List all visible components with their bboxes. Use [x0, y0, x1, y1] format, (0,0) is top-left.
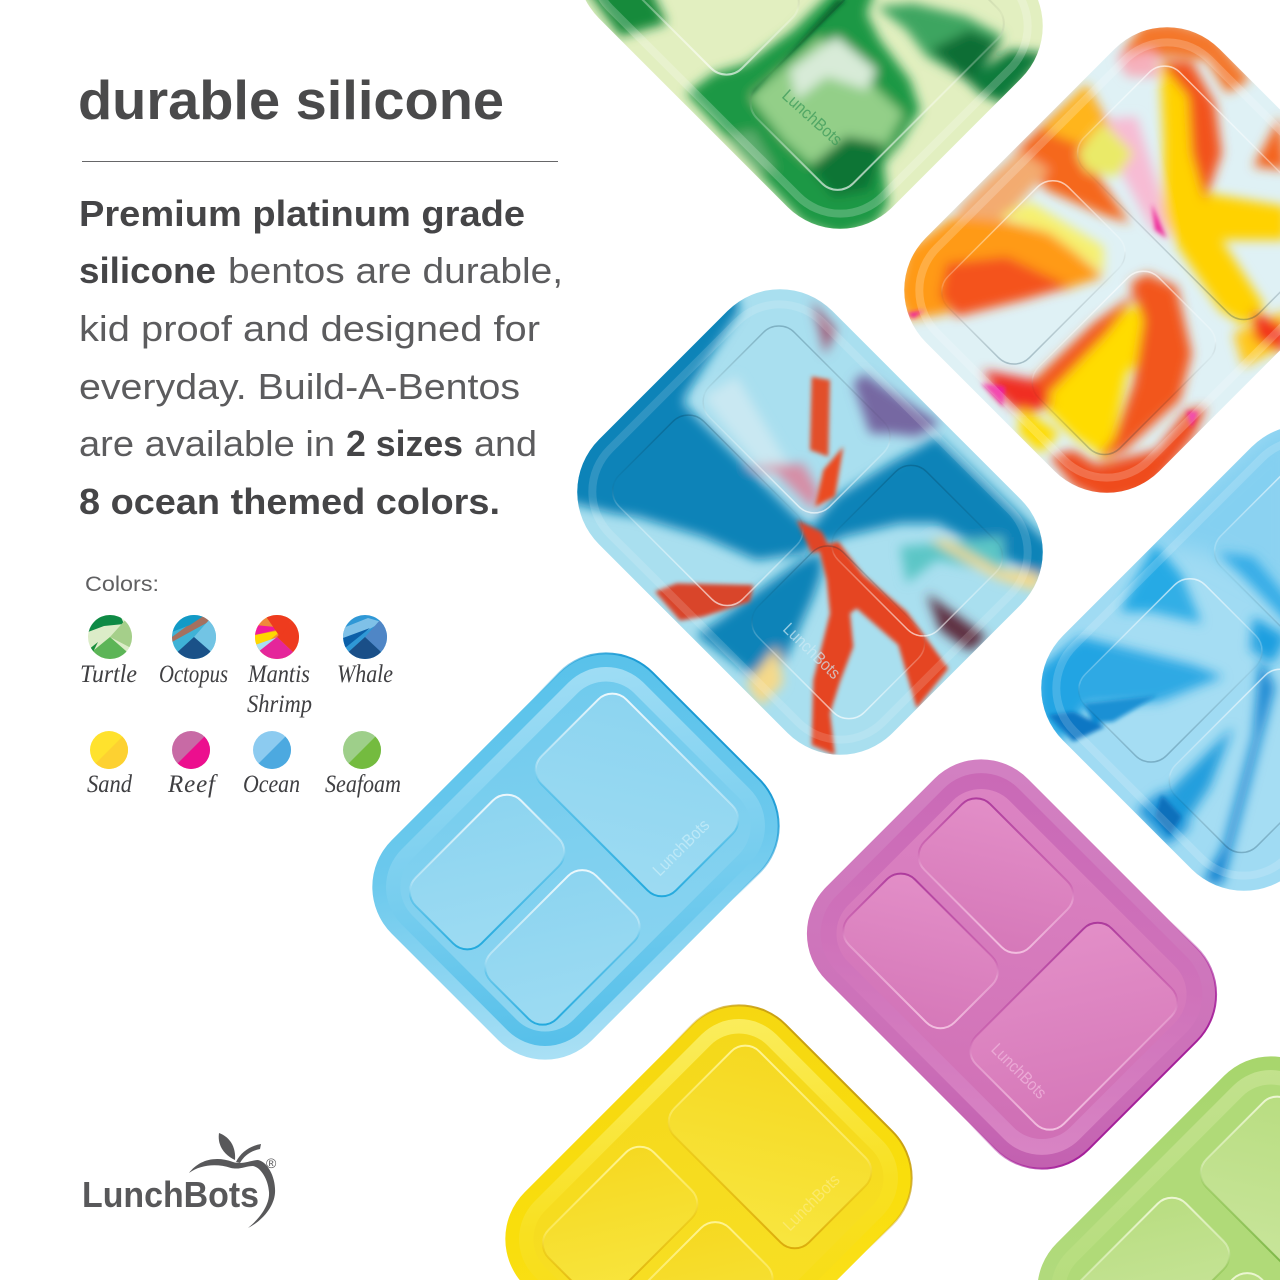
tray: whale swirl — [1030, 415, 1280, 901]
body text: silicone — [79, 250, 216, 291]
embossed logo: reef: LunchBots — [987, 1040, 1050, 1103]
body text — [79, 193, 563, 522]
icon: apple leaf and stem — [219, 1133, 261, 1163]
label: mantis shrimp — [247, 661, 312, 718]
swatch: seafoam — [325, 731, 401, 798]
title: durable silicone — [78, 69, 504, 131]
tray: ocean solid — [345, 626, 806, 1087]
label: octopus: Octopus — [159, 661, 228, 688]
embossed logo: ocean: LunchBots — [649, 815, 713, 880]
registered mark: ® — [266, 1155, 277, 1171]
body text: Premium platinum grade — [79, 193, 525, 234]
logo: LunchBots: LunchBots — [82, 1174, 259, 1215]
swatch: whale — [338, 615, 392, 682]
body text: 8 ocean themed colors. — [79, 481, 500, 522]
swatch: sand — [87, 731, 132, 798]
embossed logo: sand: LunchBots — [779, 1170, 844, 1235]
body text: and — [474, 423, 537, 464]
tray: octopus swirl — [560, 279, 1053, 765]
label: ocean: Ocean — [243, 771, 300, 798]
logo: LunchBots — [82, 1133, 275, 1228]
tray: mantis shrimp swirl — [890, 17, 1280, 503]
label: turtle: Turtle — [80, 661, 137, 688]
body text: kid proof and designed for — [79, 308, 540, 349]
tray: seafoam solid — [1010, 1029, 1280, 1280]
body text: are available in — [79, 423, 335, 464]
swatch: turtle — [82, 615, 136, 682]
body text: 2 sizes — [346, 423, 463, 464]
label: reef: Reef — [167, 771, 218, 798]
swatch: ocean — [244, 731, 300, 792]
icon: apple outline — [189, 1159, 275, 1228]
body text: bentos are durable, — [228, 250, 563, 291]
embossed logo: octopus: LunchBots — [779, 619, 844, 683]
colors heading: Colors: — [85, 573, 159, 596]
tray: sand solid — [478, 978, 939, 1280]
swatch: reef — [167, 731, 218, 798]
label: whale: Whale — [337, 661, 393, 688]
swatch: mantis shrimp — [247, 615, 312, 718]
embossed logo: turtle: LunchBots — [778, 86, 846, 149]
label: sand: Sand — [87, 771, 132, 798]
label: mantis shrimp: Shrimp — [247, 691, 312, 718]
label: mantis shrimp: Mantis — [247, 661, 310, 688]
body text: everyday. Build-A-Bentos — [79, 366, 520, 407]
tray: turtle swirl — [586, 0, 1043, 229]
swatch: octopus — [159, 615, 228, 688]
tray: reef solid — [780, 732, 1243, 1196]
label: seafoam: Seafoam — [325, 771, 401, 798]
